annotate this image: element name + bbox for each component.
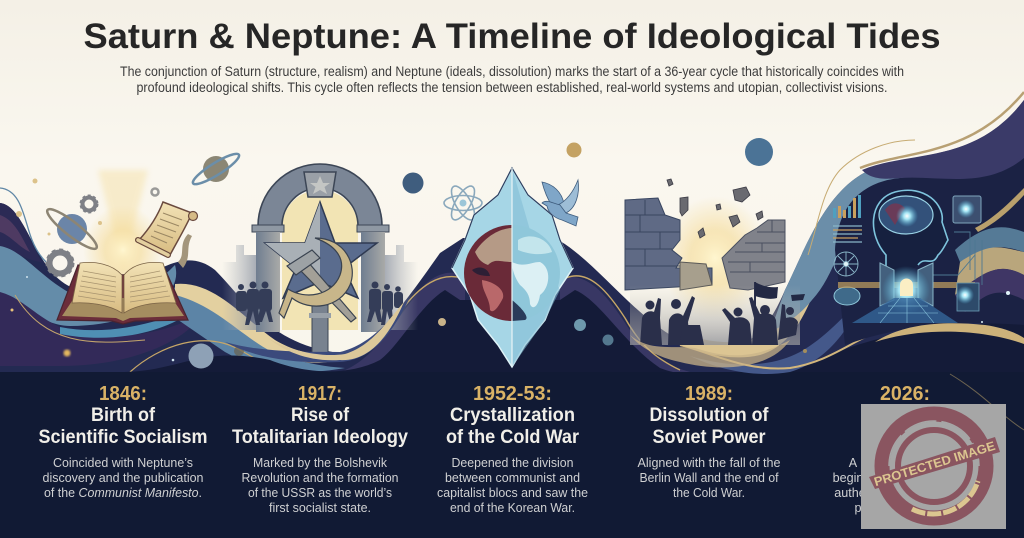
wave: mid blue band: [150, 287, 345, 372]
wave: gold thin line left: [15, 295, 145, 342]
wave: right stripes: [955, 247, 1024, 295]
sickle: [279, 238, 352, 318]
stone arch: [258, 164, 382, 226]
right wall brick lines: [728, 220, 785, 272]
globe right half: [512, 228, 560, 321]
portal doors: [880, 263, 933, 306]
timeline column: 1952-53: Deepened the division: [452, 456, 574, 470]
timeline column: 1846: of the Communist Manifesto.: [44, 486, 202, 500]
timeline column: 1989: Dissolution of: [650, 405, 769, 426]
figure group right: [722, 297, 798, 345]
ice crystal: [452, 168, 573, 367]
network icon: [834, 252, 858, 276]
navy lower field: [0, 290, 1024, 538]
icon: gear left: [47, 250, 73, 276]
circuit panel: [956, 283, 979, 311]
timeline column: 1846: Birth of: [91, 405, 156, 426]
left column: [252, 225, 284, 332]
timeline column: 1846: 1846:: [99, 383, 147, 405]
wave: centre left crest: [340, 273, 465, 372]
wave: right blue rim: [770, 135, 1000, 332]
background city: [222, 245, 418, 330]
timeline column: 1917: of the USSR as the world’s: [248, 486, 392, 500]
burst glow: [660, 196, 770, 320]
head outline: [873, 190, 948, 290]
text lines panel: [833, 226, 862, 242]
small brain: [834, 287, 860, 305]
portal light: [900, 279, 913, 296]
emblem pole: [309, 305, 331, 353]
timeline column: 1952-53: of the Cold War: [446, 427, 580, 448]
left wall: [625, 198, 712, 290]
icon: scroll: [138, 202, 198, 255]
flag: [755, 282, 778, 299]
star glints: [10, 276, 244, 361]
wave: left maroon streak: [0, 215, 30, 252]
timeline column: 1846: discovery and the publication: [42, 471, 204, 485]
timeline column: 1917: Marked by the Bolshevik: [253, 456, 388, 470]
intro paragraph: The conjunction of Saturn (structure, realism) and Neptune (ideals, dissolution) marks the start of a 36-year cycle that historically coincides with: [120, 64, 904, 79]
timeline column: 1917: [232, 383, 408, 515]
timeline column: 1917: Revolution and the formation: [242, 471, 398, 485]
wave: left dark purple band: [0, 292, 205, 366]
timeline column: 1989: [638, 383, 780, 500]
wave: centre gold lines: [400, 276, 680, 370]
icon: quill: [178, 234, 192, 268]
timeline column: 1952-53: 1952-53:: [473, 383, 552, 405]
intro paragraph: [120, 64, 904, 95]
small planets: [438, 318, 446, 326]
illustration: 1989 wall and crowd: [625, 138, 805, 345]
timeline column: 1952-53: end of the Korean War.: [450, 501, 575, 515]
brain: [879, 196, 933, 234]
wave: lower sweep blue: [690, 300, 860, 374]
illustration: 2026 AI head and portal: [833, 190, 982, 323]
icon: gear upper: [80, 196, 98, 212]
timeline column: 1846: Coincided with Neptune’s: [53, 456, 193, 470]
right column: [357, 225, 389, 332]
silhouettes left: [236, 282, 273, 325]
timeline column: 1917: Rise of: [291, 405, 350, 426]
timeline column: 1917: 1917:: [298, 383, 342, 405]
left wall brick lines: [625, 200, 680, 266]
stamp background: [861, 404, 1006, 529]
wave: thin blue string: [0, 188, 46, 262]
crowd haze: [630, 285, 800, 345]
wave: dark tech field: [835, 130, 1024, 345]
timeline column: 1846: [38, 383, 208, 500]
planet gold: [566, 142, 582, 158]
title: Saturn & Neptune: A Timeline of Ideological Tides: [84, 17, 940, 56]
timeline column: 2026: authe: [834, 486, 866, 500]
wave: left purple crest: [0, 203, 42, 262]
timeline column: 1846: Scientific Socialism: [38, 427, 208, 448]
planet below book: [188, 344, 214, 368]
wave: lower centre gold sweep: [680, 325, 905, 369]
timeline column: 1989: Aligned with the fall of the: [638, 456, 780, 470]
flag small: [791, 294, 805, 301]
timeline column: 1952-53: capitalist blocs and saw the: [437, 486, 588, 500]
crystal top outline: [452, 168, 573, 268]
wave: left blue band: [0, 246, 176, 326]
icon: small gear: [152, 188, 158, 196]
timeline column: 2026: A: [849, 456, 858, 470]
keystone with star: [304, 172, 336, 197]
planet top: [745, 138, 773, 166]
star emblem: [265, 202, 377, 298]
timeline column: 2026: [833, 383, 930, 515]
dots: [16, 178, 102, 236]
left wall lower bricks: [680, 262, 712, 290]
chip module: [953, 196, 981, 223]
stamp banner: [869, 437, 1000, 489]
stamp rings: [882, 414, 986, 518]
crowd foreground wave: [630, 335, 790, 367]
illustration: 1952 crystal globe: [452, 168, 573, 367]
wave: right purple top band: [862, 100, 1024, 179]
circuit lines: [925, 232, 982, 285]
timeline column: 1989: Berlin Wall and the end of: [640, 471, 779, 485]
timeline column: 1952-53: [437, 383, 588, 515]
stamp banner text: PROTECTED IMAGE: [872, 439, 997, 489]
bar chart: [833, 195, 861, 218]
illustration: 1846 book scene: [16, 150, 242, 324]
stamp ring gaps: [889, 421, 979, 466]
timeline column: 1989: 1989:: [685, 383, 733, 405]
globe left half: [464, 225, 512, 321]
wave: centre right crest: [560, 277, 690, 372]
icon: open book: [57, 262, 188, 324]
portal glow: [882, 266, 930, 314]
gold ribbon over arch base: [225, 297, 410, 362]
icon: ringed planet top: [190, 150, 242, 188]
gold band behind door: [838, 282, 975, 288]
icon: atom: [444, 183, 482, 223]
timeline column: 1952-53: between communist and: [445, 471, 580, 485]
wave: lower right gold crescent: [875, 323, 1024, 344]
right wall: [722, 220, 785, 290]
silhouettes right: [367, 282, 403, 325]
wave: right gold under crowd: [680, 270, 822, 357]
crowd silhouettes: [640, 282, 798, 345]
glints right: [803, 291, 1010, 353]
illustration: 1917 arch and star: [222, 164, 418, 353]
icon: dove: [542, 180, 578, 226]
crystal facets: [512, 168, 560, 367]
light rays: [98, 170, 148, 270]
timeline column: 2026: begin: [833, 471, 863, 485]
planet blue: [402, 172, 424, 194]
figure group left: [640, 296, 704, 345]
wave: right gold top ribbon: [860, 92, 1024, 168]
hammer: [287, 250, 356, 322]
timeline column: 1989: Soviet Power: [652, 427, 766, 448]
timeline column: 1917: first socialist state.: [269, 501, 371, 515]
stamp lower gold arc: [912, 481, 978, 514]
intro paragraph: profound ideological shifts. This cycle often reflects the tension between established, real-world systems and utopian, collectivist visions.: [136, 80, 888, 95]
timeline column: 2026: p: [854, 501, 862, 515]
wave: gold ribbon under arch: [175, 284, 345, 363]
wave: thin gold string top: [808, 140, 915, 255]
timeline column: 2026: 2026:: [880, 383, 930, 405]
globe divider: [511, 168, 513, 367]
timeline column: 1989: the Cold War.: [673, 486, 745, 500]
glow: [83, 205, 163, 295]
timeline column: 1917: Totalitarian Ideology: [232, 427, 408, 448]
icon: ringed planet left: [43, 204, 101, 254]
planets centre: [402, 142, 614, 346]
debris: [667, 179, 763, 238]
grid floor: [852, 298, 958, 323]
arch light: [282, 190, 358, 330]
wave: bottom right planet arcs: [950, 374, 1024, 430]
wave: thin gold line below ribbon: [130, 341, 285, 372]
timeline column: 1952-53: Crystallization: [450, 405, 575, 426]
protected image stamp: [861, 404, 1006, 529]
wave: lower left bright blue stripe: [60, 304, 200, 338]
